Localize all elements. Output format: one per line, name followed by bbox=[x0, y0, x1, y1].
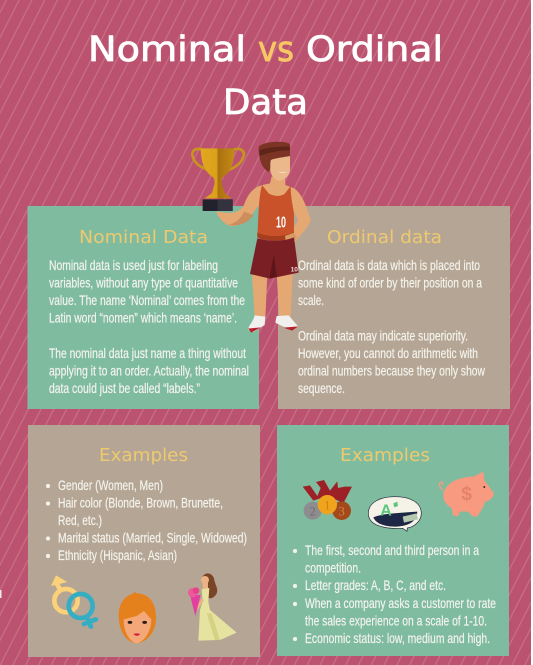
icon: letter grade speech bubble bbox=[368, 497, 421, 531]
athlete figure holding trophy: 10 bbox=[291, 266, 298, 273]
text: nominal definition: applying it to an order. Actually, the nominal bbox=[49, 364, 249, 378]
hand on hip bbox=[285, 233, 297, 245]
icon: bride with bouquet bbox=[188, 573, 237, 641]
text: nominal definition: data could just be called “labels.” bbox=[49, 381, 200, 396]
text: ordinal definition: However, you cannot do arithmetic with bbox=[298, 346, 478, 361]
title: Nominal bbox=[88, 30, 246, 70]
icon: medals: 1 bbox=[324, 498, 330, 512]
legs bbox=[252, 273, 267, 318]
heading: nominal data: Nominal Data bbox=[79, 228, 208, 248]
panel: ordinal data bbox=[278, 206, 510, 409]
face bbox=[270, 156, 290, 181]
icon: medals: 2 bbox=[309, 504, 316, 518]
shoes bbox=[248, 315, 265, 332]
list: ordinal examples: Letter grades: A, B, C, and etc. bbox=[305, 578, 446, 593]
icon: medals: 3 bbox=[338, 504, 345, 518]
list: ordinal examples: The first, second and third person in a bbox=[305, 543, 479, 558]
panel: nominal examples bbox=[28, 425, 260, 657]
text: ordinal definition: Ordinal data may indicate superiority. bbox=[298, 328, 468, 344]
icon: red-haired face bbox=[119, 592, 156, 644]
heading: examples: Examples bbox=[99, 446, 188, 466]
list: nominal examples: Hair color (Blonde, Brown, Brunette, bbox=[58, 496, 223, 510]
icon: piggy bank bbox=[439, 472, 494, 517]
athlete figure holding trophy bbox=[216, 142, 311, 333]
title bbox=[88, 30, 443, 123]
icon: piggy bank: $ bbox=[461, 484, 472, 505]
panel: ordinal examples bbox=[277, 425, 509, 656]
text: nominal definition bbox=[49, 258, 249, 396]
jersey bbox=[257, 185, 294, 240]
icon: medals bbox=[303, 480, 352, 520]
text: nominal definition: Nominal data is used just for labeling bbox=[49, 258, 218, 273]
list: nominal examples: Marital status (Married, Single, Widowed) bbox=[58, 530, 247, 546]
arms and torso skin bbox=[216, 177, 311, 245]
text: ordinal definition: scale. bbox=[298, 293, 324, 308]
text: nominal definition: Latin word “nomen” which means ‘name’. bbox=[49, 310, 237, 326]
hair bbox=[259, 142, 290, 172]
title: Ordinal bbox=[306, 30, 443, 70]
panel: nominal data bbox=[28, 206, 259, 409]
text: nominal definition: value. The name ‘Nominal’ comes from the bbox=[49, 293, 245, 308]
icon: letter grade speech bubble: A bbox=[380, 502, 392, 519]
list: ordinal examples: competition. bbox=[305, 560, 361, 576]
list: nominal examples: Gender (Women, Men) bbox=[58, 478, 163, 493]
jersey number: 10 bbox=[276, 215, 286, 232]
icon: gender symbols bbox=[51, 575, 96, 627]
heading: ordinal data: Ordinal data bbox=[327, 228, 442, 248]
shorts bbox=[250, 237, 299, 279]
icon: trophy bbox=[192, 148, 244, 211]
list: nominal examples: Ethnicity (Hispanic, Asian) bbox=[58, 548, 177, 563]
list: nominal examples: Red, etc.) bbox=[58, 513, 102, 528]
list: nominal examples bbox=[46, 478, 247, 563]
list: ordinal examples bbox=[293, 543, 496, 646]
text: nominal definition: variables, without any type of quantitative bbox=[49, 276, 238, 290]
text: ordinal definition: Ordinal data is data which is placed into bbox=[298, 258, 480, 273]
text: ordinal definition: sequence. bbox=[298, 381, 345, 396]
title: Data bbox=[223, 83, 308, 123]
heading: examples: Examples bbox=[340, 446, 430, 466]
text: ordinal definition: some kind of order by their position on a bbox=[298, 276, 482, 290]
title: vs bbox=[258, 30, 294, 70]
text: nominal definition: The nominal data just name a thing without bbox=[49, 346, 246, 361]
text: ordinal definition bbox=[298, 258, 485, 396]
